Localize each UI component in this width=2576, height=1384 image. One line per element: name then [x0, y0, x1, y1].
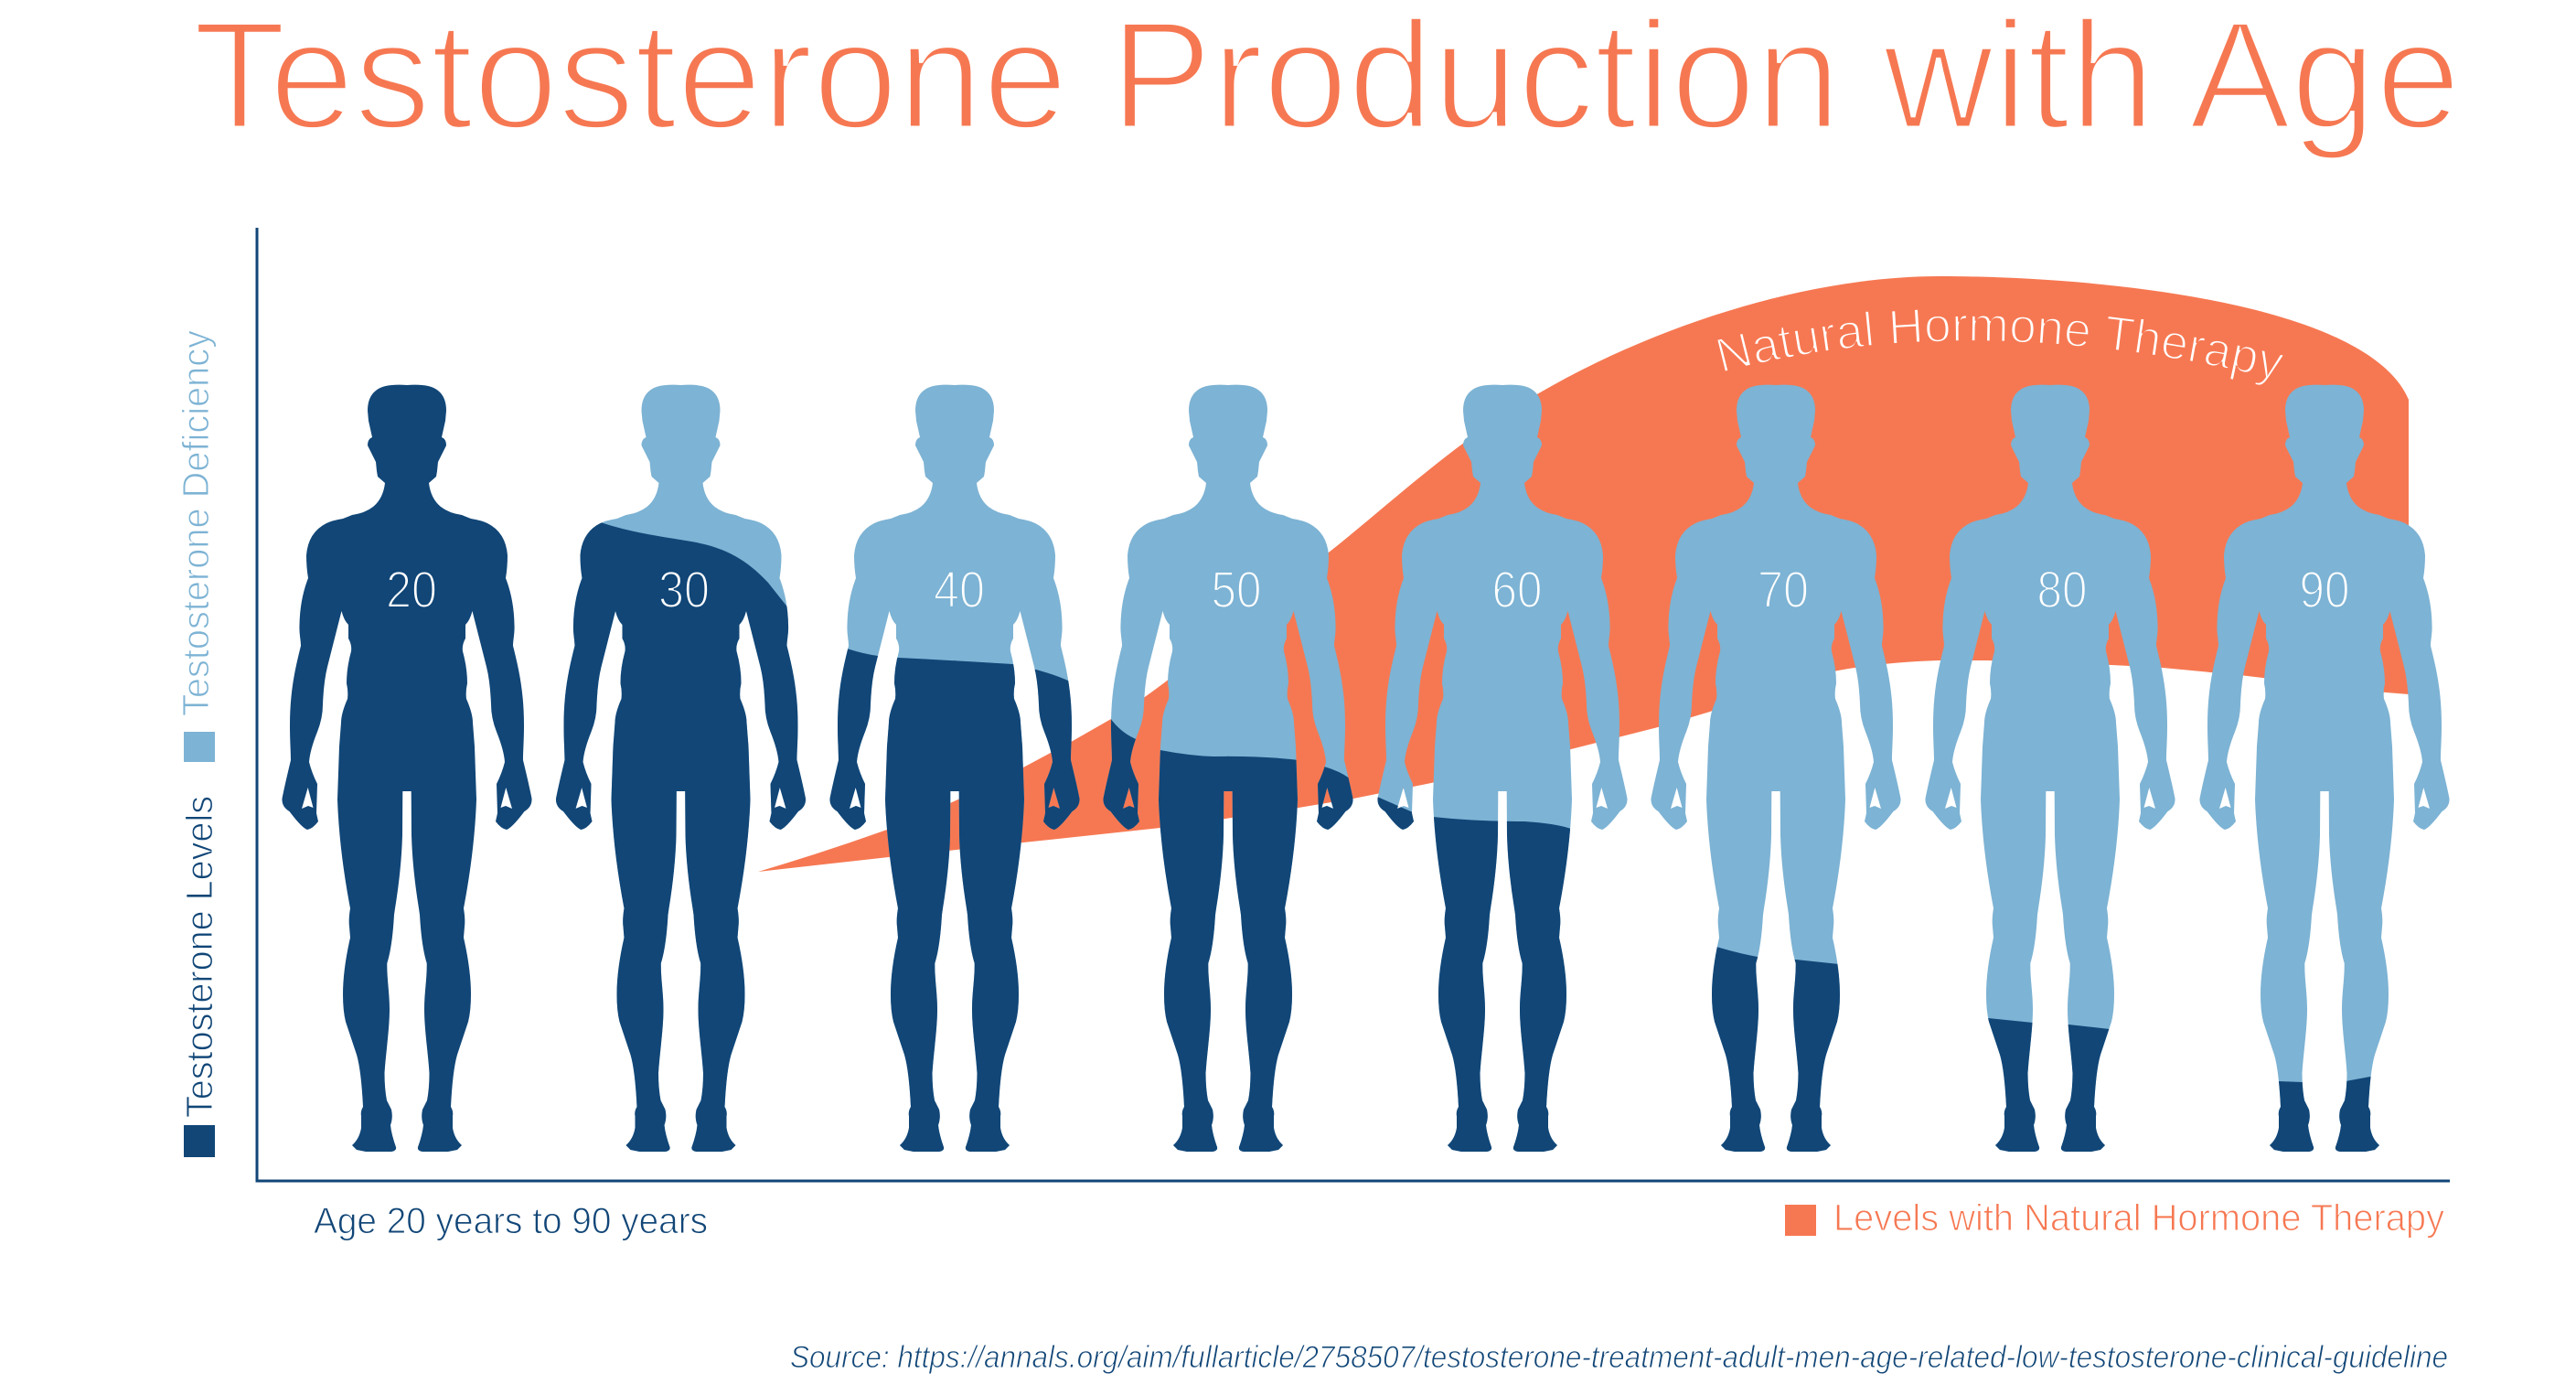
curved area label: Natural Hormone Therapy [1717, 309, 2283, 385]
axes [257, 228, 2450, 1181]
figure: age 90: 90 [2299, 561, 2350, 619]
source: Source: https://annals.org/aim/fullarticle/2758507/testosterone-treatment-adult-men-age-related-low-testosterone-clinical-guideline [790, 1340, 2448, 1375]
legend: testosterone levels: Testosterone Levels [178, 796, 220, 1118]
figure: age 40: 40 [934, 561, 985, 619]
legend: testosterone deficiency: Testosterone Deficiency [175, 330, 217, 716]
figure: age 80: 80 [2037, 561, 2087, 619]
figure: age 40 [829, 385, 1080, 1152]
figure: age 20: 20 [386, 561, 437, 619]
figure: age 70 [1651, 385, 1901, 1152]
figure: age 70: 70 [1758, 561, 1809, 619]
legend: natural hormone therapy levels: Levels with Natural Hormone Therapy [1833, 1196, 2444, 1239]
figure: age 60 [1377, 385, 1628, 1152]
x axis label: Age 20 years to 90 years [314, 1201, 708, 1241]
figure: age 30 [556, 385, 806, 1152]
figure: age 50 [1103, 385, 1353, 1152]
figure: age 20 [282, 385, 532, 1152]
figure: age 80 [1925, 385, 2175, 1152]
figure: age 60: 60 [1492, 561, 1542, 619]
chart: natural hormone therapy area [758, 276, 2409, 872]
figure: age 30: 30 [658, 561, 710, 619]
figure: age 50: 50 [1211, 561, 1262, 619]
figure: age 90 [2199, 385, 2450, 1152]
